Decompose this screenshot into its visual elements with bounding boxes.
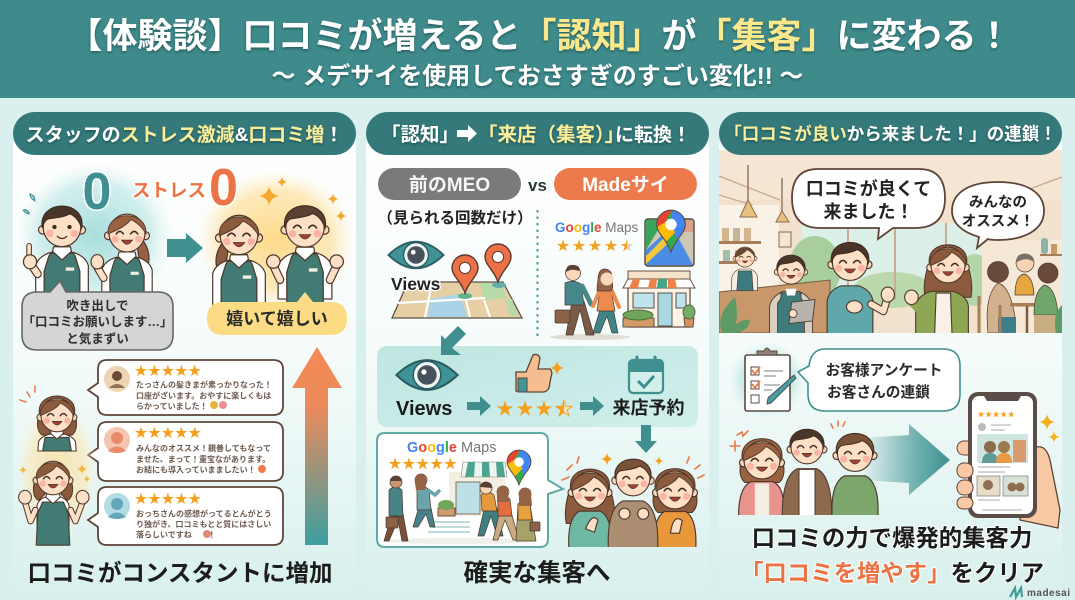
- survey bubble: [798, 349, 960, 411]
- panel 2 heading pill: 「来店（集客）」: [478, 124, 624, 146]
- panel 1 heading pill: スタッフのストレス激減&口コミ増！: [26, 123, 343, 146]
- panel 3 heading pill: [719, 112, 1062, 155]
- gray speech bubble: 吹き出しで: [66, 298, 129, 313]
- flow box: [377, 346, 698, 427]
- icon: thumbs up: [516, 354, 564, 392]
- stress zero label orange: 0: [209, 159, 238, 217]
- panel 1 conclusion: 口コミがコンスタントに増加: [27, 559, 333, 586]
- google maps scene card: Google Maps: [407, 440, 496, 456]
- google maps scene card: [377, 433, 563, 547]
- panel 1 heading pill: [13, 112, 356, 155]
- phone sparkles: [1039, 414, 1060, 442]
- panel 1: staff stress: [13, 112, 356, 600]
- stressed male staff: [23, 194, 88, 316]
- rating stars: [497, 400, 572, 416]
- Views label: Views: [391, 274, 441, 294]
- reviewer woman 1: [37, 396, 77, 451]
- panel 3 conclusion: 「口コミを増やす」をクリア: [740, 560, 1044, 586]
- arrow stressed to happy: [167, 233, 203, 263]
- shelves: [719, 228, 1062, 264]
- speech bubble: recommended: [952, 182, 1044, 248]
- family woman: [739, 439, 784, 516]
- cheer marks: [562, 453, 704, 480]
- sub label views only: （見られる回数だけ）: [377, 209, 533, 227]
- family boy: [832, 433, 878, 516]
- family man: [782, 429, 832, 516]
- survey bubble: お客さんの連鎖: [827, 383, 930, 401]
- speech bubble: recommended: オススメ！: [962, 213, 1034, 230]
- speech bubble: recommended: みんなの: [969, 194, 1027, 211]
- arrow 2: [580, 396, 604, 416]
- panel 3 conclusion: 口コミの力で爆発的集客力: [752, 525, 1032, 551]
- title: 【体験談】口コミが増えると「認知」が「集客」に変わる！: [67, 17, 1012, 56]
- review card 2: ませた、まって！重宝ながあります。: [136, 454, 270, 464]
- happy female staff: [213, 215, 265, 324]
- staff with tablet: [770, 255, 815, 337]
- review card 1: らかっていました！: [136, 401, 208, 411]
- happy male staff: [267, 206, 343, 318]
- icon: google maps: [645, 208, 694, 266]
- google maps rating: [555, 220, 639, 251]
- review card 3: [88, 487, 283, 545]
- review card 3: おっちさんの感想がってるとんがとう: [136, 508, 272, 518]
- yellow glow behind happy staff: [196, 170, 356, 310]
- stressed female staff: [91, 214, 152, 318]
- stress zero label orange: ストレス: [132, 180, 206, 201]
- female customer: [905, 245, 972, 342]
- review card 1: [88, 360, 283, 415]
- speech bubble: good reviews: 口コミが良くて: [806, 178, 931, 199]
- smartphone: [968, 392, 1037, 518]
- happy customers: [565, 459, 698, 549]
- panel 3 conclusion: [740, 525, 1044, 586]
- Views label: Views: [396, 398, 452, 420]
- pedestrians: [384, 474, 540, 541]
- zero badge teal: 0: [83, 163, 111, 221]
- gray speech bubble: 「口コミお願いします…」: [22, 315, 173, 329]
- icon: calendar: [629, 357, 663, 393]
- arrow 1: [467, 396, 491, 416]
- header banner: [0, 0, 1075, 98]
- review card 3: り独がき、口コミもとと質にはさしい: [136, 519, 271, 529]
- family exclamation marks: [730, 421, 845, 451]
- madesai logo: madesai: [1027, 588, 1071, 599]
- review card 1: たっさんの髪きまが素っかりなった！: [136, 380, 272, 390]
- plant: [720, 297, 750, 333]
- booking label: 来店予約: [612, 398, 684, 418]
- panel 2 heading pill: に転換！: [615, 123, 691, 146]
- pill: Madesai: Madeサイ: [582, 175, 669, 196]
- review card 2: みんなのオススメ！親善してもなって: [136, 443, 271, 453]
- panel 3: word-of-mouth chain: [719, 112, 1062, 600]
- pill: previous MEO: [378, 168, 521, 200]
- speech bubble: good reviews: [792, 169, 945, 239]
- teal glow behind stressed staff: [17, 163, 173, 307]
- panel 2 heading pill: [366, 112, 709, 155]
- hand holding phone: [957, 441, 1060, 528]
- speech bubble: good reviews: 来ました！: [824, 202, 914, 222]
- stress zero label orange: [132, 159, 238, 217]
- google maps rating: Google Maps: [555, 220, 639, 235]
- customer man center: [608, 459, 658, 549]
- review card 1: 口座がざいます。おやすに楽しくもは: [136, 390, 271, 400]
- counter: [719, 280, 830, 333]
- big growth arrow: [292, 347, 342, 545]
- phone fingers: [957, 463, 973, 509]
- arrow down to customers: [635, 425, 657, 453]
- customer woman left: [565, 469, 615, 548]
- sparkles around reviewers: [19, 386, 90, 482]
- panel 3 heading pill: 「口コミが良いから来ました！」の連鎖！: [724, 124, 1057, 144]
- arrow to flow: [441, 326, 466, 355]
- clipboard icon: [729, 342, 805, 418]
- yellow speech bubble: [207, 292, 347, 335]
- pill: Madesai: [554, 168, 697, 200]
- pill: previous MEO: 前のMEO: [409, 174, 490, 196]
- panel 2 heading pill: 「認知」: [381, 124, 459, 146]
- map with pins: [392, 244, 522, 318]
- male customer: [827, 242, 894, 341]
- panel 2 conclusion: 確実な集客へ: [464, 559, 610, 587]
- walking couple: [550, 265, 630, 340]
- customer woman right: [652, 469, 698, 549]
- pendant lamps: [740, 165, 789, 222]
- survey bubble: お客様アンケート: [826, 362, 942, 379]
- vs label: vs: [528, 176, 547, 195]
- shop front: [623, 271, 695, 327]
- panel 2: awareness to visits: [366, 112, 709, 600]
- review card 2: お結にも導入っていまましたい！: [136, 464, 256, 474]
- icon: eye: [396, 360, 458, 390]
- window: [789, 223, 993, 308]
- gray speech bubble: [22, 281, 173, 350]
- review card 3: 落らしいですね ！: [136, 530, 216, 540]
- yellow speech bubble: 嬉いて嬉しい: [226, 308, 328, 328]
- dotted divider: [536, 210, 538, 338]
- subtitle: 〜 メデサイを使用しておさすぎのすごい変化!! 〜: [272, 62, 803, 90]
- icon: eye: [388, 242, 444, 268]
- yellow glow behind reviewers: [17, 400, 97, 540]
- sparkles: [259, 177, 346, 222]
- gray speech bubble: と気まずい: [66, 331, 129, 346]
- barista: [732, 247, 758, 291]
- review card 2: [88, 422, 283, 481]
- reviewer woman 2: [19, 461, 89, 545]
- family group: [739, 429, 878, 516]
- cafe scene: [719, 150, 1062, 342]
- gradient arrow to phone: [862, 424, 950, 495]
- diners at table: [979, 254, 1062, 333]
